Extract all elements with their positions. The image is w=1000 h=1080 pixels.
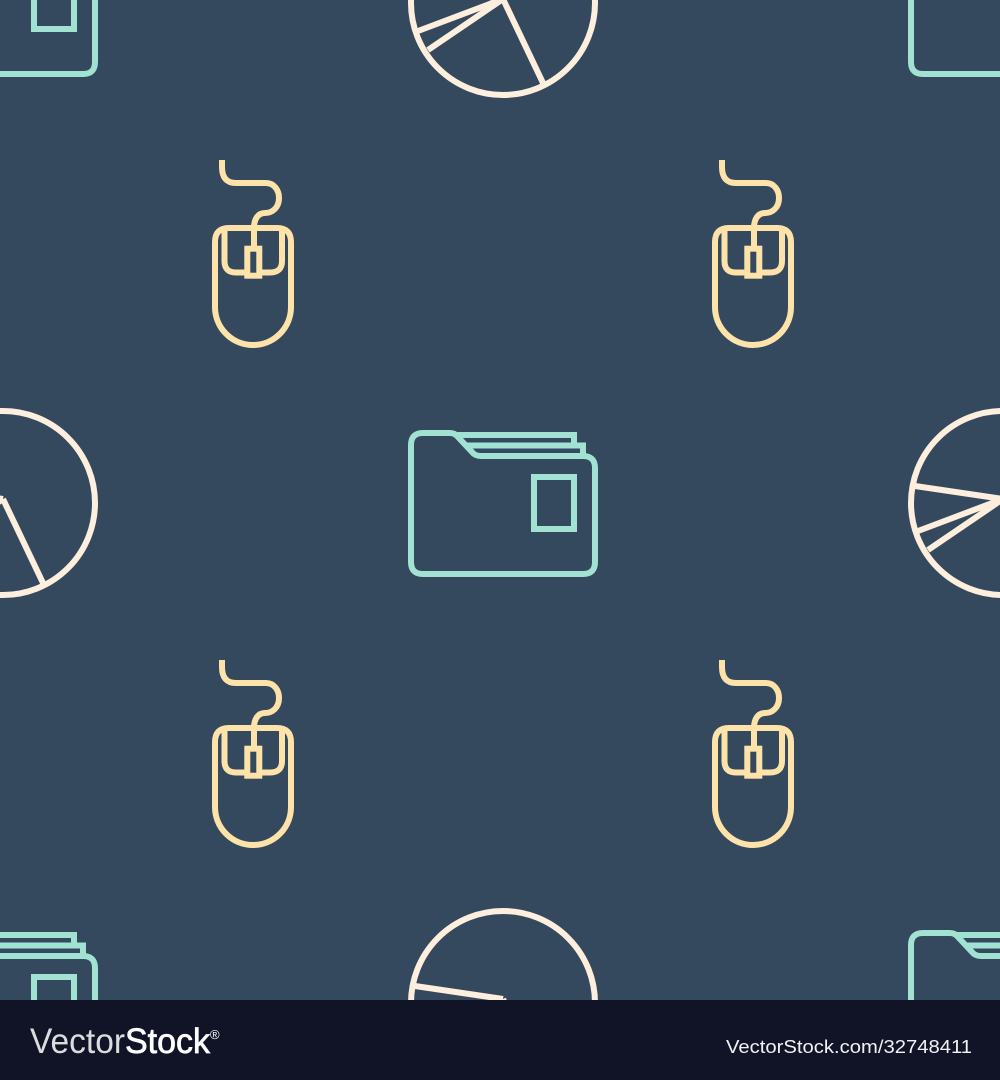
icon: pie chart top	[411, 0, 595, 95]
icon: folder bottom left	[0, 933, 95, 1074]
icon: mouse lower left	[215, 660, 291, 845]
footer logo: Vector	[30, 1022, 125, 1061]
icon: mouse lower right	[715, 660, 791, 845]
footer image id: VectorStock.com/32748411	[726, 1037, 972, 1057]
footer logo: ®	[210, 1027, 220, 1042]
icon: folder top left	[0, 0, 95, 74]
icon: pie chart left	[0, 411, 95, 595]
icon: mouse upper right	[715, 160, 791, 345]
icon: pie chart bottom	[411, 911, 595, 1080]
icon: folder bottom right	[911, 933, 1000, 1074]
footer logo: Stock	[125, 1022, 210, 1061]
footer bar	[0, 1000, 1000, 1080]
icon: pie chart right	[911, 411, 1000, 595]
icon: mouse upper left	[215, 160, 291, 345]
icon: folder center	[411, 433, 595, 574]
icon: folder top right	[911, 0, 1000, 74]
footer logo	[30, 1022, 220, 1061]
